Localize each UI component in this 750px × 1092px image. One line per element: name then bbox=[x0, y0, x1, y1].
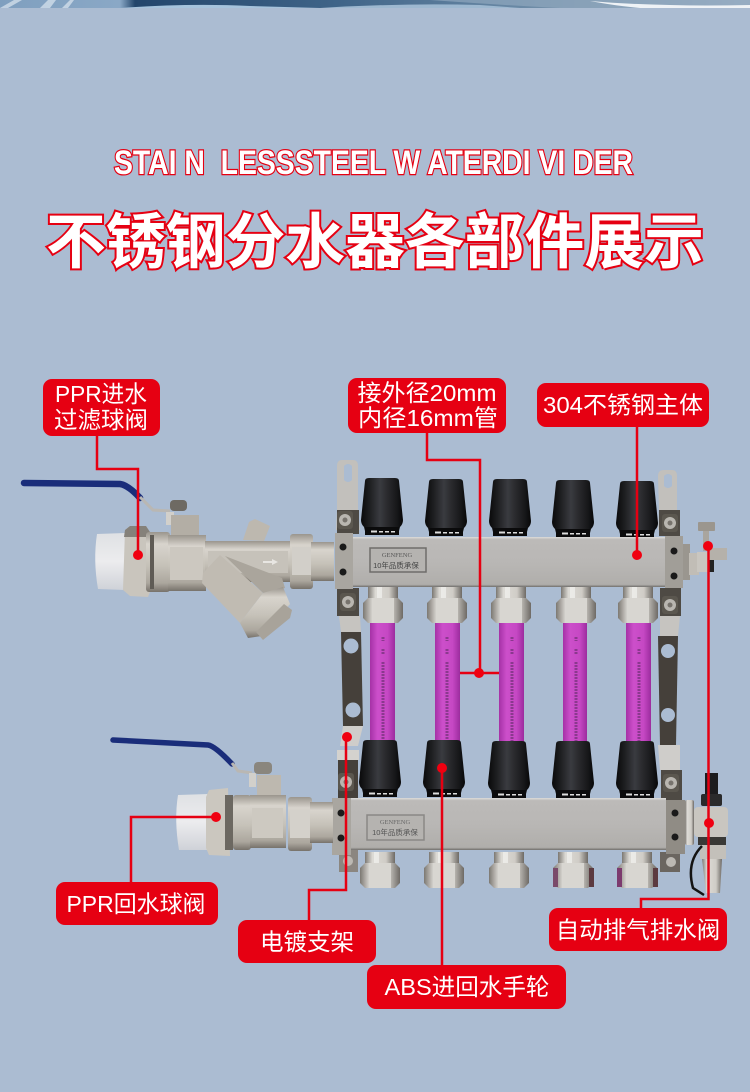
union nut bbox=[288, 797, 312, 851]
brand plate upper: GENFENG bbox=[382, 552, 412, 559]
label: PPR inlet filter ball valve: 过滤球阀 bbox=[54, 407, 148, 433]
tail hex bbox=[310, 802, 333, 843]
label: 304 stainless body: 304不锈钢主体 bbox=[543, 392, 703, 418]
drain plug bbox=[243, 519, 270, 541]
label: auto vent and drain valve: 自动排气排水阀 bbox=[556, 917, 720, 943]
leader: PPR inlet valve bbox=[97, 436, 143, 560]
label: pipe size: 内径16mm管 bbox=[358, 405, 498, 431]
Y strainer branch bbox=[225, 556, 285, 593]
brand plate lower: 10年品质承保 bbox=[372, 827, 418, 837]
subtitle: English: STAI N LESSSTEEL W ATERDI VI DER bbox=[114, 144, 633, 182]
lower auto vent and drain valve bbox=[685, 773, 728, 895]
label: PPR inlet filter ball valve bbox=[43, 379, 160, 436]
purple PEX pipes bbox=[370, 623, 651, 745]
valve stem top bbox=[166, 500, 199, 536]
leader: ABS handwheel bbox=[437, 763, 447, 965]
leader: plated bracket bbox=[309, 732, 352, 920]
label: PPR inlet filter ball valve: PPR进水 bbox=[55, 381, 147, 407]
strainer pipe bbox=[205, 541, 291, 582]
hex nut bbox=[123, 526, 150, 597]
label: PPR return ball valve: PPR回水球阀 bbox=[66, 891, 206, 917]
top water texture strip bbox=[0, 0, 750, 8]
leader: PPR return valve bbox=[131, 812, 221, 882]
upper stems and nuts bbox=[363, 587, 658, 623]
title: Chinese: 不锈钢分水器各部件展示 bbox=[46, 209, 704, 276]
white PPR socket bbox=[95, 533, 125, 590]
leader: stainless body bbox=[632, 427, 642, 560]
label: auto vent and drain valve bbox=[549, 908, 727, 951]
label: pipe size bbox=[348, 378, 506, 433]
union nut bbox=[290, 534, 313, 589]
upper knobs row bbox=[361, 478, 658, 538]
collar and body bbox=[146, 532, 170, 592]
white PPR socket bbox=[176, 794, 208, 850]
label: ABS handwheel: ABS进回水手轮 bbox=[384, 974, 550, 1000]
left bracket upper bbox=[336, 460, 363, 872]
label: PPR return ball valve bbox=[56, 882, 218, 925]
leader: auto vent drain valve bbox=[641, 541, 714, 908]
brand plate upper bbox=[370, 548, 426, 572]
brand plate upper: 10年品质承保 bbox=[373, 560, 419, 570]
upper air vent fitting bbox=[683, 522, 727, 580]
hex nut bbox=[206, 788, 230, 856]
label: plated bracket bbox=[238, 920, 376, 963]
blue lever handle bbox=[24, 483, 140, 498]
lower knobs row bbox=[359, 740, 658, 798]
valve stem top bbox=[249, 762, 281, 795]
lower stems and nuts bbox=[360, 852, 658, 888]
tail hex bbox=[311, 542, 334, 581]
lower manifold bar bbox=[332, 798, 685, 855]
upper inlet filter ball valve bbox=[24, 483, 334, 640]
right bracket upper and lower bbox=[658, 470, 682, 872]
label: 304 stainless body bbox=[537, 383, 709, 427]
label: plated bracket: 电镀支架 bbox=[260, 929, 354, 955]
brand plate lower bbox=[367, 815, 424, 840]
label: ABS handwheel bbox=[367, 965, 566, 1009]
lower return ball valve bbox=[113, 740, 333, 856]
upper manifold bar bbox=[335, 533, 683, 589]
leader: pipe size bbox=[427, 433, 499, 678]
brand plate lower: GENFENG bbox=[380, 819, 410, 826]
collar and body bbox=[225, 795, 233, 850]
label: pipe size: 接外径20mm bbox=[358, 380, 496, 406]
blue lever handle bbox=[113, 740, 232, 764]
